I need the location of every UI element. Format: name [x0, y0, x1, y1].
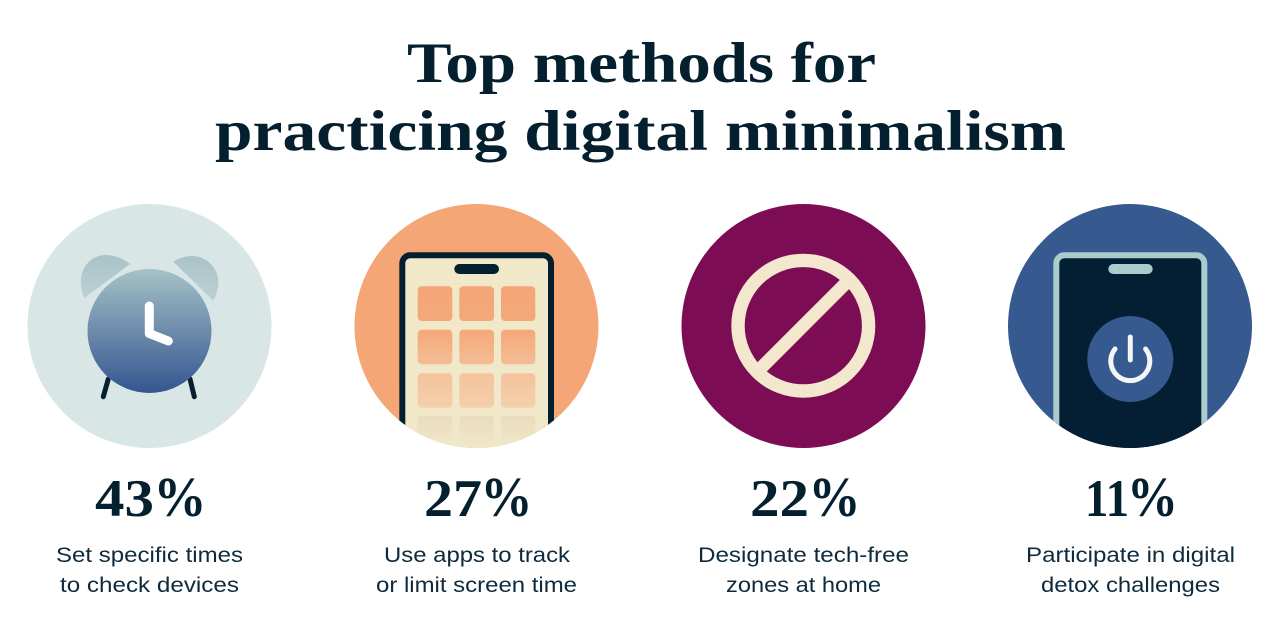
description: use apps: Use apps to track: [384, 543, 570, 567]
statistic: 11%: 11: [1085, 470, 1129, 528]
statistic: 43%: 43: [95, 470, 154, 528]
icon: prohibition sign: [682, 204, 926, 448]
statistic: 22%: 22: [750, 470, 809, 528]
statistic: 43%: %: [154, 467, 206, 529]
panel: digital detox: [1008, 204, 1252, 597]
statistic: 22%: %: [808, 467, 860, 529]
statistic: 27%: 27: [424, 470, 482, 528]
icon: phone with power button: [1008, 204, 1252, 448]
description: tech-free zones: [698, 543, 909, 597]
description: set specific times: Set specific times: [56, 543, 243, 567]
title: [215, 32, 1066, 163]
title: Top methods for: [407, 32, 876, 95]
description: tech-free zones: Designate tech-free: [698, 543, 909, 567]
description: digital detox: Participate in digital: [1026, 543, 1235, 567]
description: digital detox: [1026, 543, 1235, 597]
description: digital detox: detox challenges: [1041, 573, 1220, 597]
title: practicing digital minimalism: [215, 100, 1066, 163]
description: tech-free zones: zones at home: [726, 573, 881, 597]
description: use apps: [376, 543, 577, 597]
description: set specific times: [56, 543, 243, 597]
icon: alarm clock: [28, 204, 272, 448]
icon: phone with app grid: [354, 204, 598, 448]
statistic: 27%: %: [480, 467, 532, 529]
panel: set specific times: [28, 204, 272, 597]
panel: use apps: [354, 204, 598, 597]
description: use apps: or limit screen time: [376, 573, 577, 597]
panel: tech-free zones: [682, 204, 926, 597]
description: set specific times: to check devices: [60, 573, 239, 597]
statistic: 11%: %: [1127, 467, 1178, 529]
